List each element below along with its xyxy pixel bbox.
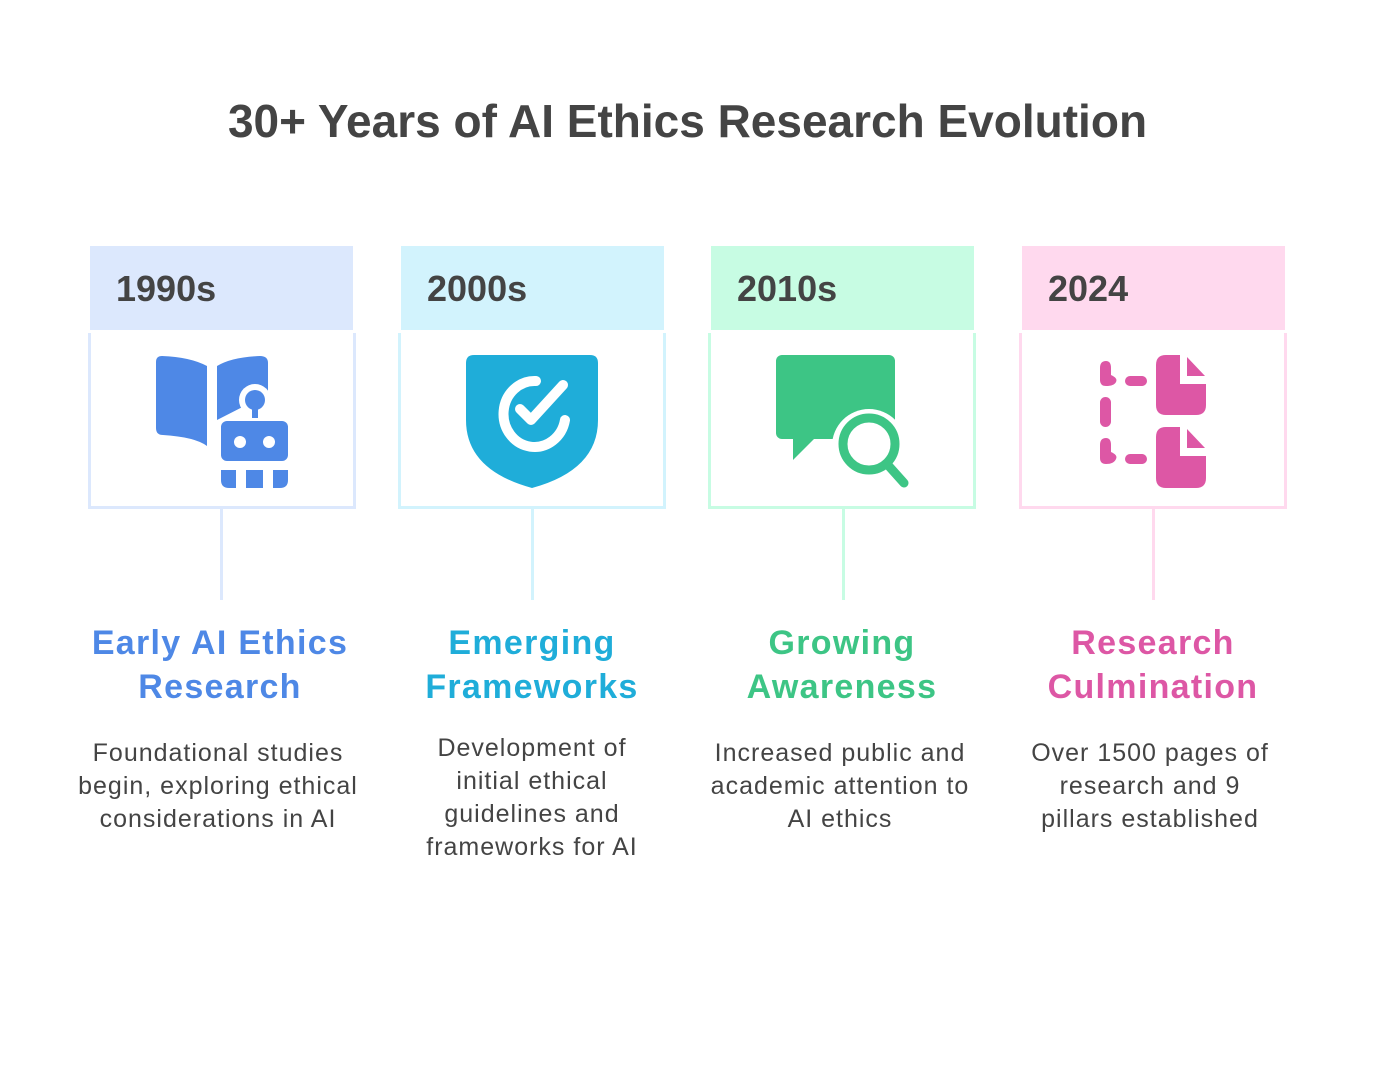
- heading: Early AI Ethics: [92, 624, 348, 662]
- description: guidelines and: [444, 800, 620, 828]
- icon: shield check: [466, 355, 598, 488]
- icon: documents tree: [1100, 355, 1206, 488]
- description: [711, 739, 969, 833]
- description: considerations in AI: [100, 805, 336, 833]
- header: 1990s: 1990s: [116, 268, 216, 309]
- panel: 2010s: [708, 246, 976, 833]
- heading: Emerging: [448, 624, 616, 662]
- heading: Frameworks: [425, 668, 639, 706]
- description: pillars established: [1041, 805, 1259, 833]
- panel: 1990s: [78, 246, 358, 833]
- heading: Culmination: [1048, 668, 1258, 706]
- header: 2024: 2024: [1048, 268, 1128, 309]
- panel: 2000s: [398, 246, 666, 861]
- heading: Awareness: [747, 668, 937, 706]
- description: Development of: [437, 734, 627, 762]
- connector: [842, 509, 845, 600]
- description: Increased public and: [715, 739, 965, 767]
- title: 30+ Years of AI Ethics Research Evolution: [228, 95, 1147, 147]
- header: 2000s: [401, 246, 664, 330]
- heading: Growing: [768, 624, 915, 662]
- heading: Research: [1071, 624, 1235, 662]
- description: AI ethics: [788, 805, 892, 833]
- header: 2010s: [711, 246, 974, 330]
- panel: 2024: [1019, 246, 1287, 833]
- description: academic attention to: [711, 772, 969, 800]
- description: [426, 734, 638, 861]
- description: frameworks for AI: [426, 833, 638, 861]
- icon box: 2000s: [398, 333, 666, 509]
- connector: [1152, 509, 1155, 600]
- connector: [531, 509, 534, 600]
- description: research and 9: [1060, 772, 1240, 800]
- connector: [220, 509, 223, 600]
- heading: Research: [138, 668, 302, 706]
- description: initial ethical: [456, 767, 608, 795]
- icon: chat search: [776, 355, 908, 488]
- header: 2000s: 2000s: [427, 268, 527, 309]
- heading: [425, 624, 639, 706]
- description: [1031, 739, 1269, 833]
- heading: [1048, 624, 1258, 706]
- description: [78, 739, 358, 833]
- icon box: 1990s: [88, 333, 356, 509]
- heading: [747, 624, 937, 706]
- description: Over 1500 pages of: [1031, 739, 1269, 767]
- header: 2024: [1022, 246, 1285, 330]
- header: 1990s: [90, 246, 353, 330]
- header: 2010s: 2010s: [737, 268, 837, 309]
- icon box: 2024: [1019, 333, 1287, 509]
- description: begin, exploring ethical: [78, 772, 358, 800]
- icon: book robot: [156, 356, 288, 488]
- description: Foundational studies: [93, 739, 343, 767]
- heading: [92, 624, 348, 706]
- icon box: 2010s: [708, 333, 976, 509]
